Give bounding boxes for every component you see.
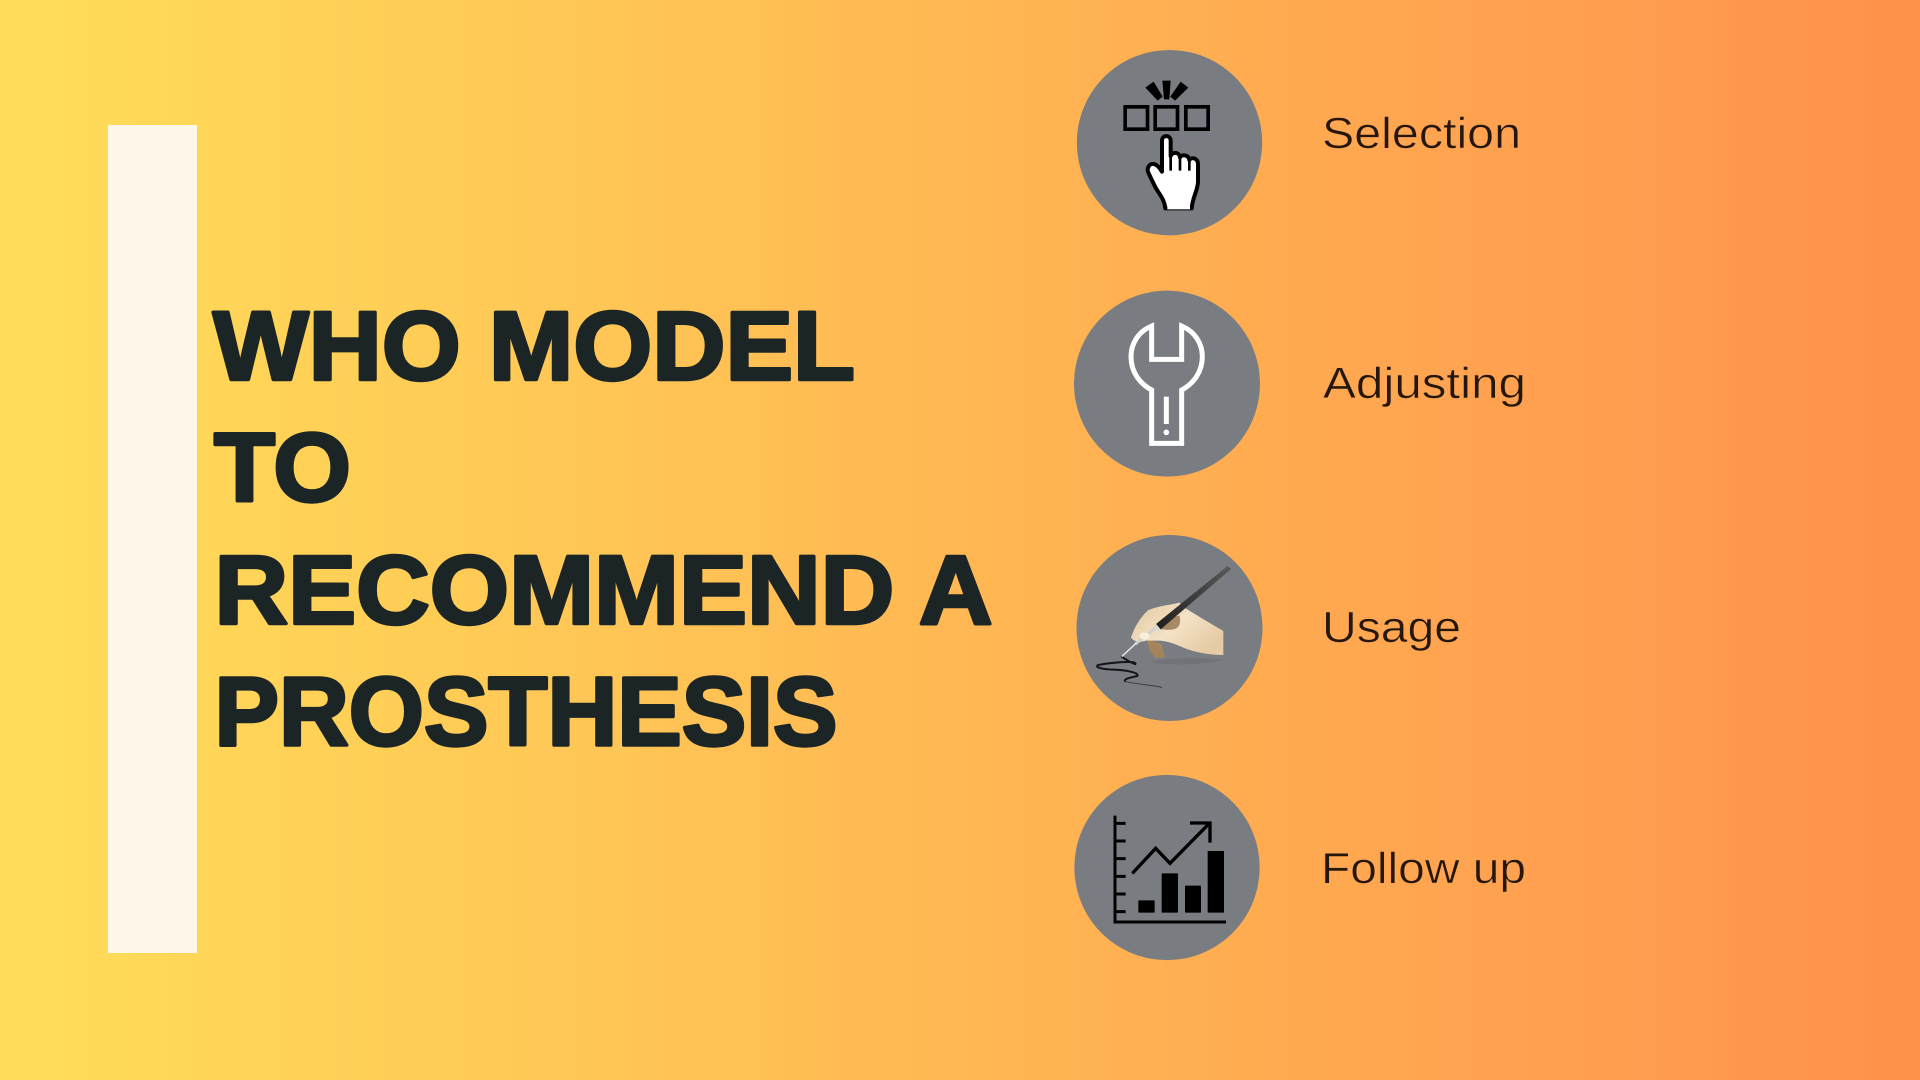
label: adjusting: Adjusting xyxy=(1323,359,1526,408)
title xyxy=(213,292,993,766)
step: selection xyxy=(1077,50,1521,235)
icon: hand pressing a button xyxy=(1077,50,1262,235)
step: adjusting xyxy=(1074,291,1526,477)
icon: rising bar chart xyxy=(1074,775,1260,960)
label: selection: Selection xyxy=(1322,109,1521,158)
title: PROSTHESIS xyxy=(214,657,838,766)
title: WHO MODEL xyxy=(213,292,855,400)
icon: wrench xyxy=(1074,291,1260,477)
step: usage xyxy=(1076,535,1461,721)
label: follow up: Follow up xyxy=(1321,844,1526,893)
icon: hand writing with a pen xyxy=(1076,535,1262,721)
accent bar xyxy=(108,125,197,953)
title: TO xyxy=(214,413,351,522)
label: usage: Usage xyxy=(1322,603,1461,652)
step: follow up xyxy=(1074,775,1526,960)
title: RECOMMEND A xyxy=(214,536,993,644)
